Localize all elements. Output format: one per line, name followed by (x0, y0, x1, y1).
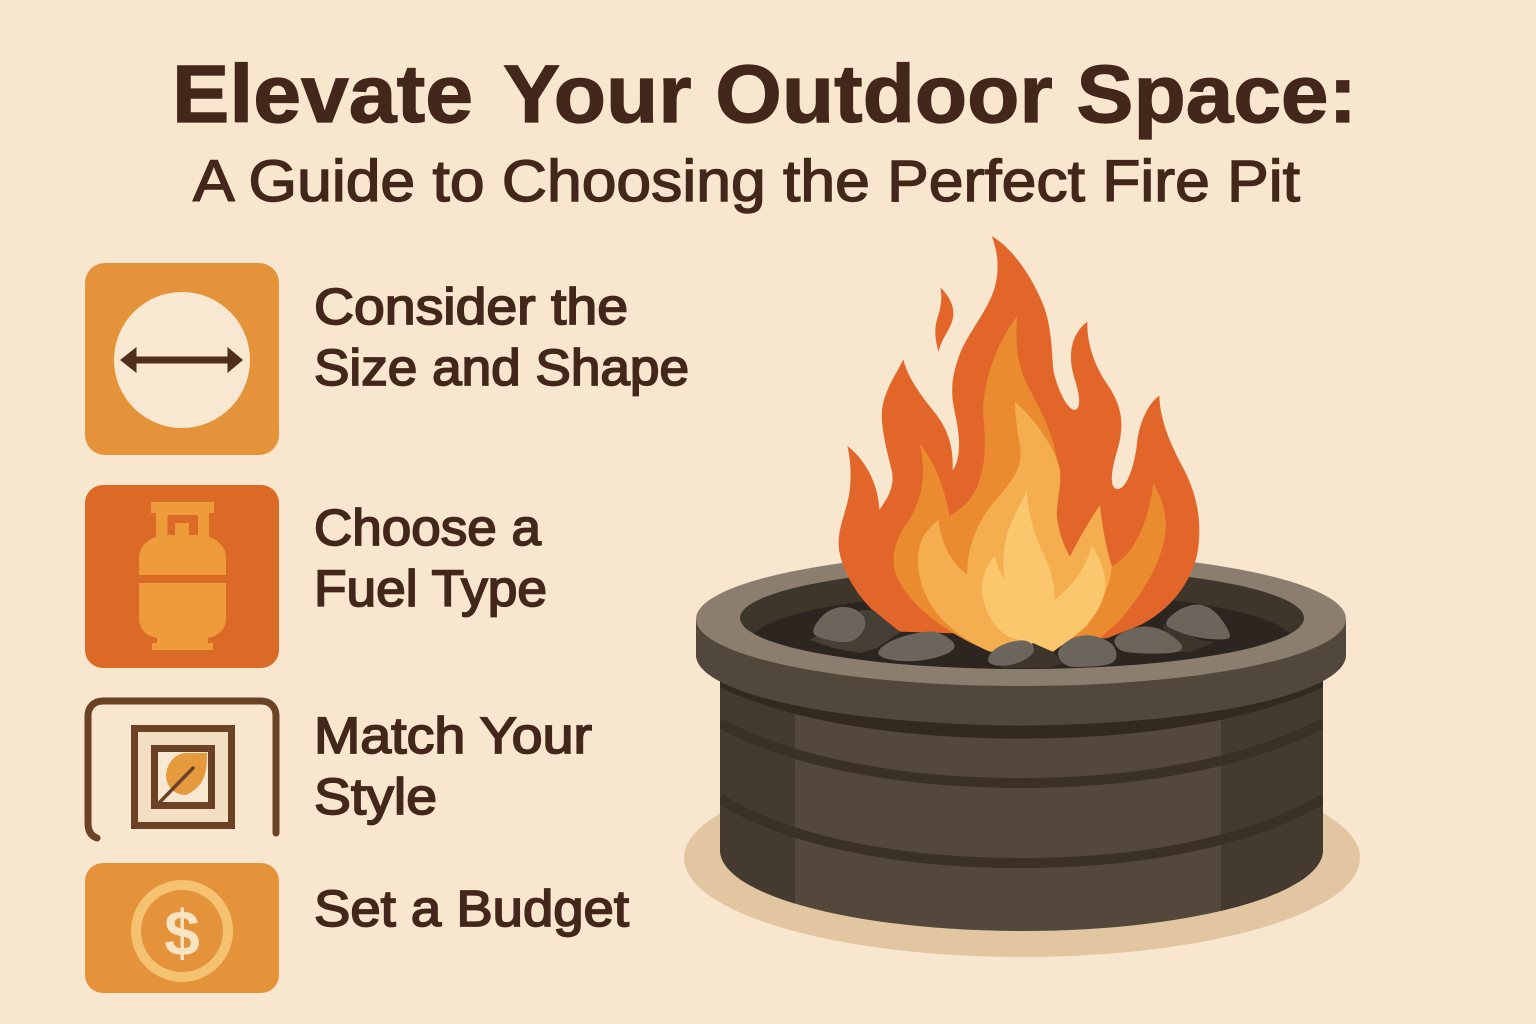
icon: fuel type (85, 485, 279, 668)
label: match your style: Match Your (314, 707, 592, 764)
label: consider the size and shape (314, 278, 689, 396)
label: match your style: Style (314, 768, 437, 825)
label: consider the size and shape: Size and Shape (314, 339, 689, 396)
label: consider the size and shape: Consider the (314, 278, 628, 335)
pit body (720, 681, 1323, 931)
ground shadow (684, 759, 1360, 957)
icon: budget (85, 863, 279, 993)
label: choose a fuel type: Fuel Type (314, 560, 547, 617)
title: Elevate (172, 49, 473, 140)
title (172, 49, 1357, 140)
subtitle: A Guide to Choosing the Perfect Fire Pit (193, 149, 1300, 214)
flame (839, 236, 1199, 652)
label: match your style (314, 707, 592, 825)
icon: match your style (88, 701, 276, 838)
icon: size and shape (85, 263, 279, 455)
pit rim (696, 552, 1346, 725)
illustration: fire pit (684, 236, 1360, 957)
flame ember (935, 287, 953, 352)
label: choose a fuel type: Choose a (314, 499, 542, 556)
icon: budget: $ (164, 897, 200, 969)
stones (810, 605, 1230, 668)
label: choose a fuel type (314, 499, 547, 617)
title: Your Outdoor Space: (503, 49, 1357, 140)
label: set a budget: Set a Budget (314, 880, 629, 937)
